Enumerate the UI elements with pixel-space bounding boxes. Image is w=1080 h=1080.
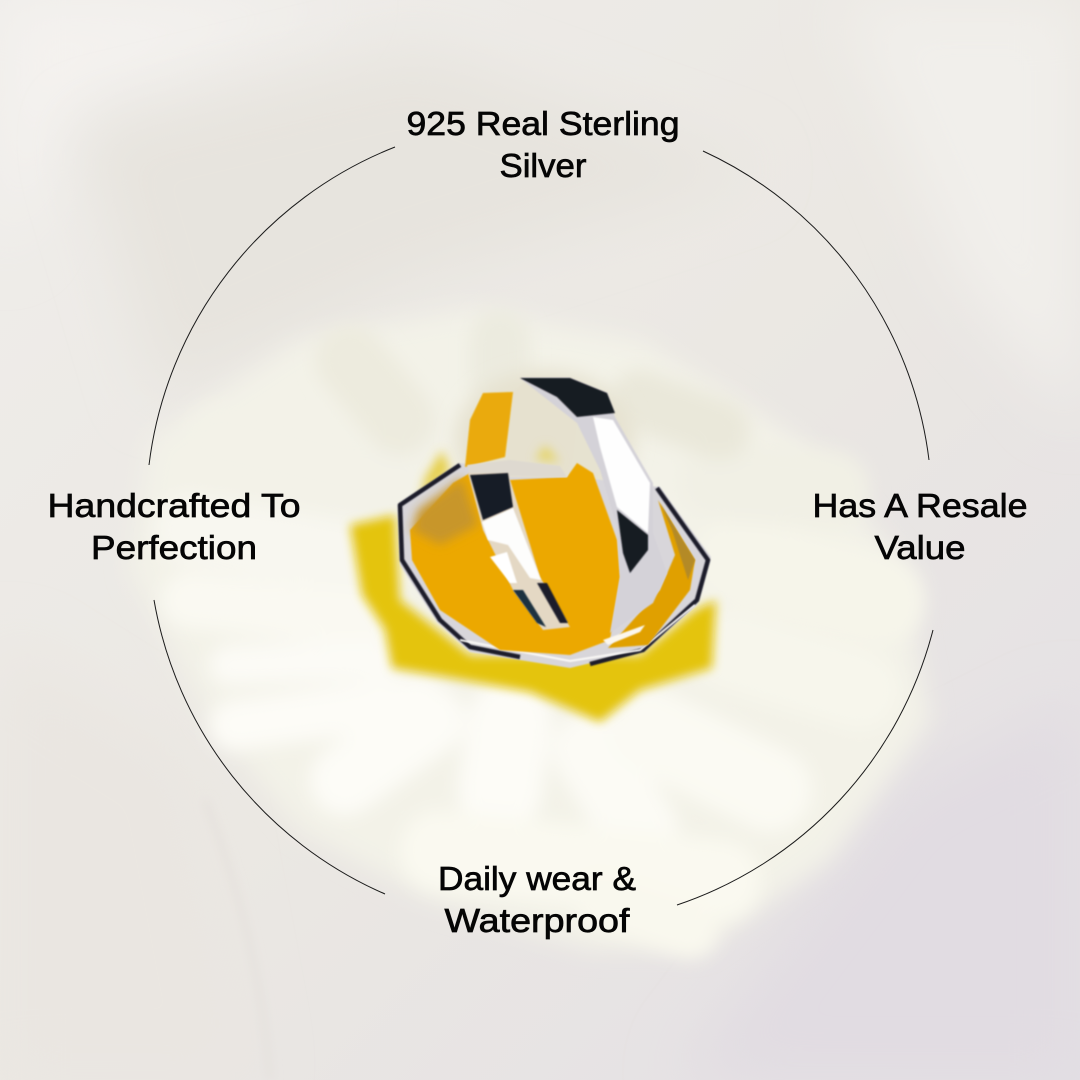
upright ring: far shank xyxy=(520,378,667,633)
lower ring: silver band xyxy=(398,463,711,668)
label: Handcrafted To Perfection: Handcrafted To xyxy=(48,487,300,524)
upright ring: crossbar xyxy=(467,460,567,477)
lower ring: dark rim xyxy=(400,465,708,664)
label: Daily wear & Waterproof: Daily wear & xyxy=(438,860,636,897)
label: Daily wear & Waterproof xyxy=(438,860,636,939)
petal mass xyxy=(130,310,930,950)
label: Daily wear & Waterproof: Waterproof xyxy=(444,902,630,939)
flower: white petals xyxy=(130,310,930,950)
lower ring: far-side band xyxy=(608,500,695,648)
label: 925 Real Sterling Silver: Silver xyxy=(500,147,586,184)
pale centre behind ring xyxy=(455,370,635,510)
lower ring: reflection xyxy=(412,478,478,545)
lower ring: yellow inside xyxy=(410,463,620,655)
label: 925 Real Sterling Silver xyxy=(406,105,680,184)
label: Has A Resale Value: Has A Resale xyxy=(812,487,1028,524)
label: Has A Resale Value: Value xyxy=(874,529,966,566)
flower: yellow centre xyxy=(350,450,716,722)
lower ring: white lip xyxy=(460,605,695,661)
label: Handcrafted To Perfection xyxy=(48,487,300,566)
label: Handcrafted To Perfection: Perfection xyxy=(91,529,257,566)
label: 925 Real Sterling Silver: 925 Real Sterling xyxy=(406,105,680,142)
silver rings xyxy=(398,378,711,668)
label: Has A Resale Value xyxy=(812,487,1028,566)
radial petals xyxy=(190,340,880,930)
circular divider arcs xyxy=(149,147,933,905)
upright ring: opening xyxy=(507,380,577,477)
upright ring: inner yellow band xyxy=(465,392,513,467)
upright ring: near shank xyxy=(468,473,570,630)
